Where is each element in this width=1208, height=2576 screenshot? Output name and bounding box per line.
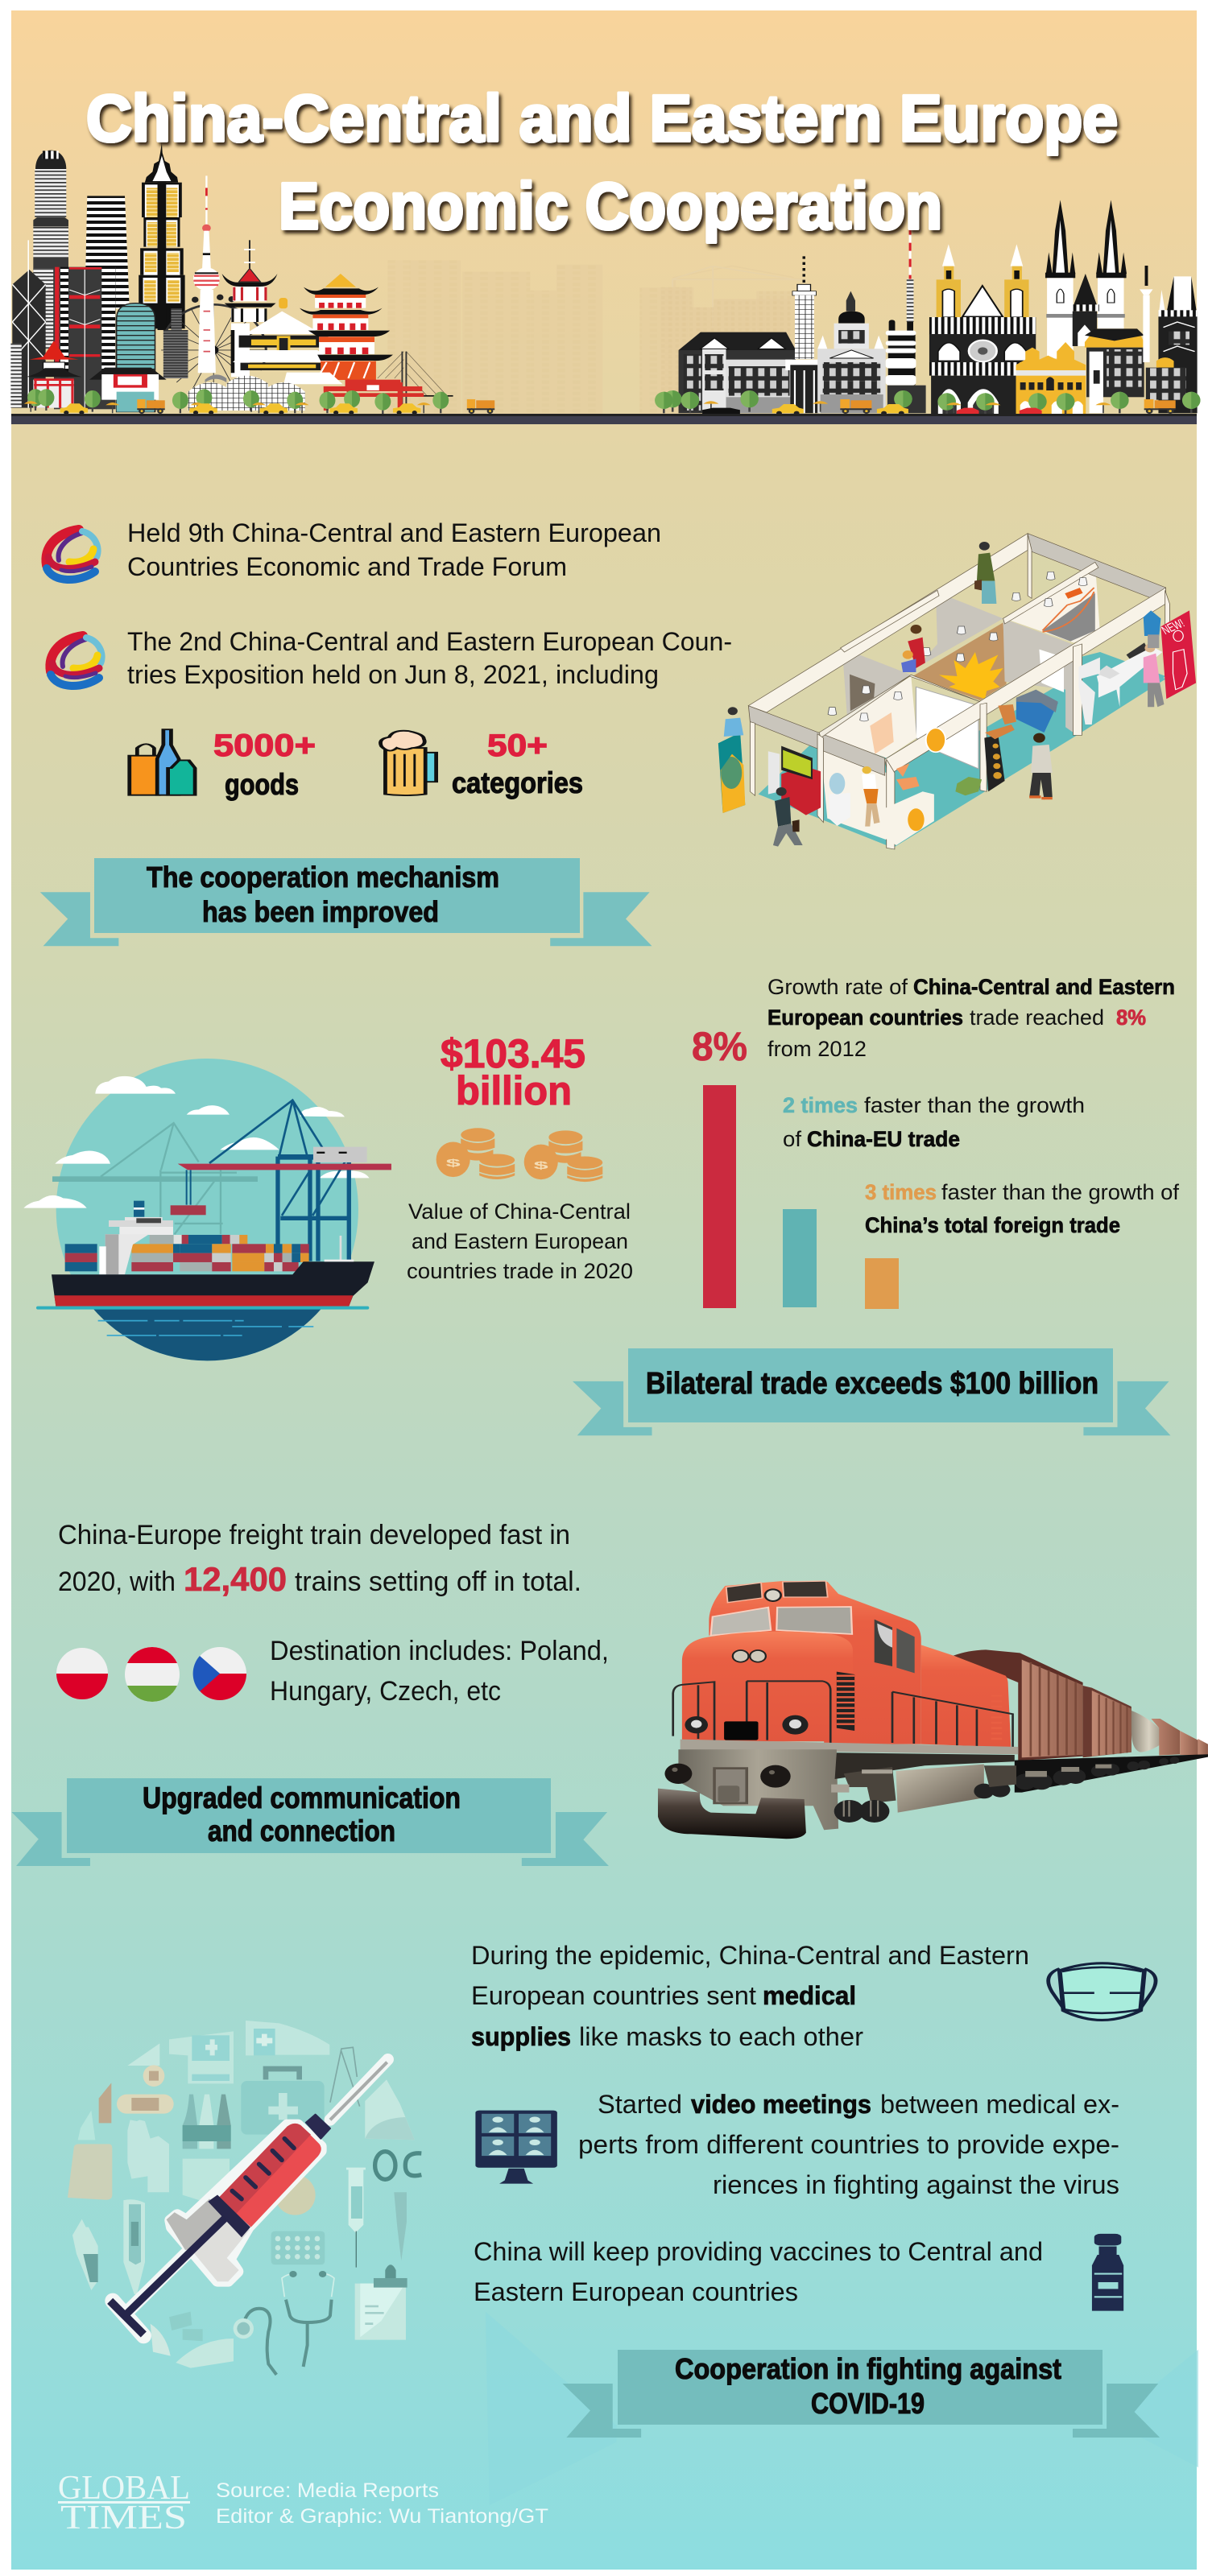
stat: 50+ categories: categories [452,766,583,799]
stat: $103.45 billion [441,1031,585,1113]
text: 3 times: 3 times [865,1180,937,1204]
icon: coins: $ [446,1158,461,1169]
section 1: cooperation mechanism [40,518,1196,946]
nose lights [733,1650,766,1662]
teal building [117,303,155,412]
coupler [714,1769,747,1803]
icon: coins [436,1128,602,1182]
white temple roof [283,373,343,384]
windows [711,1581,915,1673]
lookout tower [785,256,823,413]
undercarriage and wheels [1015,1754,1208,1793]
tower one [33,151,68,349]
text: freight train: 2020, with [58,1567,176,1597]
bar chart: growth comparison: 8% [692,1024,747,1069]
illustration: freight train [658,1581,1208,1839]
text: 2 times: faster than the growth [864,1093,1085,1117]
dark townhouse [1085,328,1144,413]
text: freight train: 12,400 [184,1560,287,1598]
text: 2 times: 2 times [783,1093,858,1117]
text: trade value caption: countries trade in 2020 [407,1259,633,1283]
illustration: medical supplies and syringe [68,2021,421,2375]
text: video meetings [578,2090,1119,2199]
crane top container [313,1147,367,1162]
waterline [36,1307,369,1310]
text: 3 times [865,1180,1179,1237]
bogies [831,1765,1016,1823]
people [724,542,1164,847]
text: vaccines: China will keep providing vaccines to Central and [474,2237,1043,2266]
sea ripples [98,1321,313,1335]
pagoda level tower [222,240,277,377]
text: video meetings: video meetings [691,2090,871,2119]
banded broadcast tower [886,211,926,413]
spotlights [828,572,1087,721]
text: destinations: Destination includes: Poland, [270,1636,609,1666]
ribbon banner three: and connection [208,1814,395,1847]
partition walls [819,550,1166,840]
background crane [52,1123,258,1234]
ribbon banner two: Bilateral trade exceeds $100 billion [646,1367,1098,1401]
wagons [954,1649,1208,1761]
icon: flag of Czech Republic [193,1647,246,1700]
ribbon banner one: has been improved [202,895,439,928]
walkway plate [681,1740,1018,1754]
faint medical icons [68,2021,421,2375]
syringe [110,2059,388,2336]
text: growth rate: China-Central and Eastern [913,975,1175,999]
text: 2 times: China-EU trade [807,1127,960,1151]
railings [673,1681,1013,1782]
red gate [324,380,424,411]
castle tower [1158,276,1198,413]
dose marks [232,2139,294,2199]
foreground crane [209,1100,350,1261]
big temple [233,298,334,370]
text: destinations: Hungary, Czech, etc [270,1676,501,1707]
ornate grey tower [163,308,188,378]
headlamps [685,1715,809,1740]
text: freight train [58,1520,581,1598]
stat: 50+ categories [452,729,583,799]
Oriental Pearl tower [193,175,220,373]
ship mast [325,1236,354,1261]
needle [330,2062,387,2120]
fuel tank [896,1765,984,1813]
text: growth rate [767,975,1175,1061]
illustration: container ship and cranes [23,1059,391,1360]
text: trade value caption [407,1199,633,1283]
icon: coins: $ [534,1160,548,1171]
text: growth rate: European countries [767,1005,963,1030]
text: growth rate: from 2012 [767,1037,867,1061]
booth floor [759,652,1166,848]
street trees and cars [24,389,494,415]
ship containers [65,1235,309,1271]
text: growth rate: 8% [1116,1005,1146,1030]
red pagoda small [27,341,81,408]
text: 3 times: China’s total foreign trade [865,1213,1120,1237]
stat: $103.45 billion: billion [456,1068,572,1113]
icon: vaccine vial [1092,2234,1123,2311]
icon: face mask [1049,1963,1156,2020]
faint crane [672,266,807,328]
roll-up banners [718,610,1196,813]
title: Economic Cooperation [279,170,942,243]
stat: 5000+ goods [213,729,316,801]
text: forum [127,518,661,581]
credits: Editor & Graphic: Wu Tiantong/GT [216,2505,548,2528]
text: masks [471,1941,1029,2051]
title [86,82,1118,243]
manor house [679,332,796,413]
icon: beer mug [380,731,436,795]
text: 3 times: faster than the growth of [941,1180,1179,1204]
stat: 50+ categories: 50+ [487,729,548,763]
text: growth rate: trade reached [970,1005,1104,1030]
text: video meetings: between medical ex- [880,2090,1119,2119]
ribbon banner four [563,2350,1160,2438]
nose [682,1632,853,1741]
barrel light end [167,2199,250,2281]
tall pagoda [300,274,393,380]
text: masks: European countries sent [471,1981,756,2010]
text: video meetings: riences in fighting against the virus [713,2170,1119,2199]
cable bridge [378,352,453,405]
title: China-Central and Eastern Europe [86,82,1118,155]
Tyn church [1045,200,1127,358]
icon: goods [130,729,195,795]
street trees and cars [655,390,1201,415]
logo: Global Times: TIMES [60,2500,187,2537]
ship superstructure [99,1201,173,1274]
text: trade value caption: and Eastern European [412,1229,628,1253]
text: forum: Countries Economic and Trade Forum [127,552,567,581]
ribbon banner one: The cooperation mechanism [147,861,499,894]
text: vaccines: Eastern European countries [474,2277,798,2306]
text: video meetings: perts from different countries to provide expe- [578,2130,1119,2159]
roll-up banners: NEW! [1160,617,1187,637]
thin TV tower [1140,266,1153,362]
section 4: fighting COVID-19 [68,1941,1198,2505]
icon: flag of Poland [56,1648,108,1699]
skyline: Chinese cities [10,142,494,415]
icon: flag of Hungary [125,1647,180,1702]
frame beams [748,534,1169,849]
text: trade value caption: Value of China-Central [408,1199,631,1224]
long hood [921,1645,1011,1748]
text: freight train: trains setting off in total. [295,1567,581,1597]
credits: Source: Media Reports [216,2479,439,2502]
HSBC building [54,267,116,409]
ferris wheel [147,291,281,409]
barrel red fluid [219,2124,321,2227]
furniture [768,642,1148,845]
caps [306,2115,330,2139]
text: exposition: tries Exposition held on Jun 8, 2021, including [127,660,659,689]
yellow gabled hall [1016,342,1086,415]
cab [709,1581,921,1744]
text: exposition: The 2nd China-Central and Eastern European Coun- [127,627,732,656]
Jin Mao tower [139,142,185,330]
logo: Global Times: GLOBAL [58,2470,190,2507]
icon: forum logo two [50,636,102,686]
glass domes [188,374,305,411]
ribbon banner two [573,1348,1171,1435]
ribbon banner four: Cooperation in fighting against [675,2352,1061,2385]
text: growth rate: Growth rate of [767,975,908,999]
louvers [837,1672,854,1731]
text: vaccines [474,2237,1043,2306]
faint buildings [660,287,795,408]
section 3: communication and connection [11,1520,1208,1866]
sea [93,1308,322,1360]
Bank of China tower [10,240,46,408]
text: masks: supplies [471,2022,571,2051]
tower two [85,196,130,308]
hanging container [171,1170,206,1215]
hull red band [54,1295,353,1307]
skyline: European cities [655,200,1201,415]
sticker outline [113,2059,388,2336]
small gabled house [1146,357,1186,400]
section 2: bilateral trade [23,975,1179,1435]
text: exposition [127,627,732,689]
text: video meetings: Started [598,2090,682,2119]
road [11,414,1197,424]
buffers [664,1764,791,1788]
illustration: exhibition booths [718,534,1196,849]
domed palace [817,291,886,413]
ribbon banner three [11,1778,609,1866]
text: forum: Held 9th China-Central and Eastern European [127,518,661,547]
ribbon banner three: Upgraded communication [143,1781,461,1814]
frame block [678,1749,838,1830]
text: 2 times [783,1093,1085,1151]
sky circle [56,1059,358,1360]
stat: 5000+ goods: goods [225,768,299,801]
logo: Global Times [58,2470,190,2537]
icon: video meeting monitor [475,2111,557,2184]
text: 2 times: of [783,1127,801,1151]
icon: forum logo one [46,530,98,580]
stat: 5000+ goods: 5000+ [213,729,316,763]
clouds [23,1076,370,1208]
text: masks: like masks to each other [579,2022,863,2051]
credits [216,2479,548,2528]
text: masks: medical [763,1981,856,2010]
gate building [89,368,167,412]
ribbon banner four: COVID-19 [811,2387,925,2420]
ribbon banner one [40,858,652,946]
text: destinations [270,1636,609,1707]
faint background city [387,260,801,415]
text: freight train: China-Europe freight train developed fast in [58,1520,570,1550]
plunger [127,2218,225,2313]
bar chart: growth comparison [692,1024,899,1309]
text: masks: During the epidemic, China-Central and Eastern [471,1941,1029,1970]
stat: $103.45 billion: $103.45 [441,1031,585,1076]
pilot plow [658,1789,806,1839]
ship hull [52,1261,374,1307]
crane beam [178,1164,391,1170]
faint background ribbon shapes [486,2312,1198,2505]
cathedral [929,244,1036,415]
